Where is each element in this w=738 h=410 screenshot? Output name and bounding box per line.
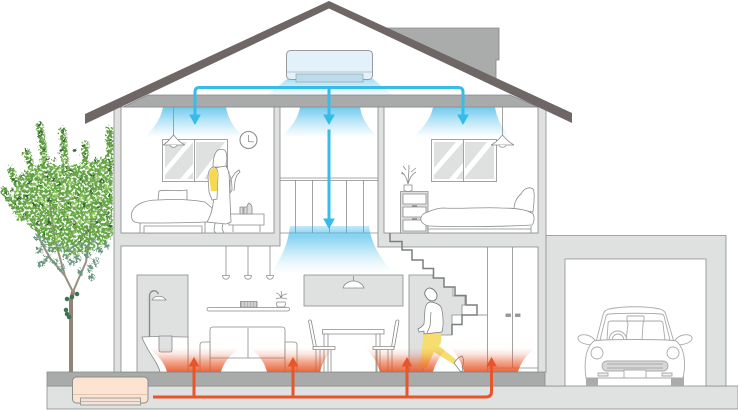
car wheels [586,372,684,386]
shelf [207,291,290,311]
shower [150,291,158,337]
main duct [195,88,463,118]
lamp [352,276,354,282]
warm air arrows [153,358,496,397]
plant [401,165,416,192]
car cabin [596,307,674,342]
head [425,288,437,301]
window [162,140,228,182]
stair underside panel [409,275,465,372]
raised arm [228,170,240,193]
atrium and first floor [121,107,538,372]
pendant lamp [163,107,185,147]
second floor room right [384,107,538,233]
upper sprigs [4,125,111,218]
foundation band [47,372,546,386]
three pendant lights [222,246,274,279]
car plate and fog lights [624,370,646,378]
window [432,140,496,182]
fan right [413,107,510,137]
car mirrors [578,335,692,345]
woman figure [207,149,240,233]
torso [418,302,443,334]
garage [545,236,726,386]
light leaves [18,160,108,238]
bathtub [142,337,188,372]
arm [427,312,431,333]
house walls [114,107,546,372]
fan left [145,107,243,137]
walking person [418,288,464,372]
unit vent [80,398,140,405]
pendant lamp [491,107,514,147]
fan 4 [450,348,535,372]
fan 2 [250,348,334,372]
branches [40,205,92,292]
fan 3 [365,348,447,372]
roof [85,1,572,124]
ground floor furnishings [137,233,538,372]
closet [488,247,538,372]
bathroom panel [137,275,188,372]
canopy mass [14,155,113,256]
cool air arrows [190,88,468,228]
under floor duct [153,362,492,397]
staircase [390,233,477,335]
attic interior and ceiling slab [123,95,538,107]
trunk foliage clusters [66,294,77,317]
wall mass [114,107,546,372]
unit body [286,50,372,80]
dress [207,166,231,224]
car grille [602,361,668,371]
teal lower foliage [38,238,107,277]
car headlights [591,347,603,359]
hair and head [213,149,227,167]
centre arrow lower [328,130,330,220]
centre arrow upper [328,88,330,118]
feet [214,223,224,233]
arrow heads [190,358,496,366]
fan centre [281,107,378,137]
trunk [71,292,73,372]
bed [421,188,534,233]
second floor room left [121,107,274,233]
left bedroom [131,107,264,233]
atrium railing [280,178,378,233]
yellow sleeve [208,167,218,200]
clock [240,132,257,148]
unit body [72,377,148,403]
dresser [400,192,428,233]
dining table and chairs [308,320,399,372]
cool air fans [145,107,510,137]
fan 1 [148,348,240,372]
floor air conditioner [72,377,148,405]
wall art panel [304,275,403,306]
car body [585,340,685,378]
sofa [200,327,297,372]
right bedroom [400,107,534,233]
warm air fans [148,348,535,372]
ground band [47,386,738,409]
dark leaves [7,125,111,240]
risers [194,362,407,397]
foliage [4,125,113,277]
shoe [454,356,464,372]
dormer block [387,28,499,79]
garage wall [545,236,726,386]
arrow heads [190,115,468,228]
lower cool air fan [270,226,394,274]
trousers [418,332,458,369]
tree [4,125,113,372]
ground and foundation [47,372,738,409]
car [578,307,692,386]
wall air conditioner upstairs [268,50,392,95]
bed [131,190,212,233]
towel [159,336,172,352]
cool air under unit [268,78,392,95]
car seats [607,321,665,340]
side table [229,203,264,232]
